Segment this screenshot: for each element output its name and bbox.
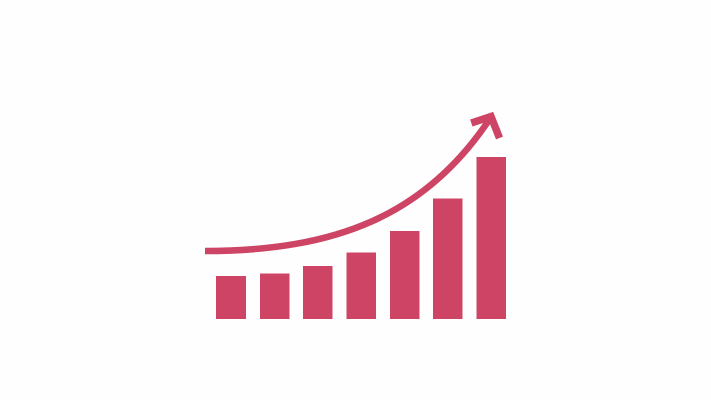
bar chart	[216, 157, 506, 319]
trend arrow	[205, 116, 500, 251]
